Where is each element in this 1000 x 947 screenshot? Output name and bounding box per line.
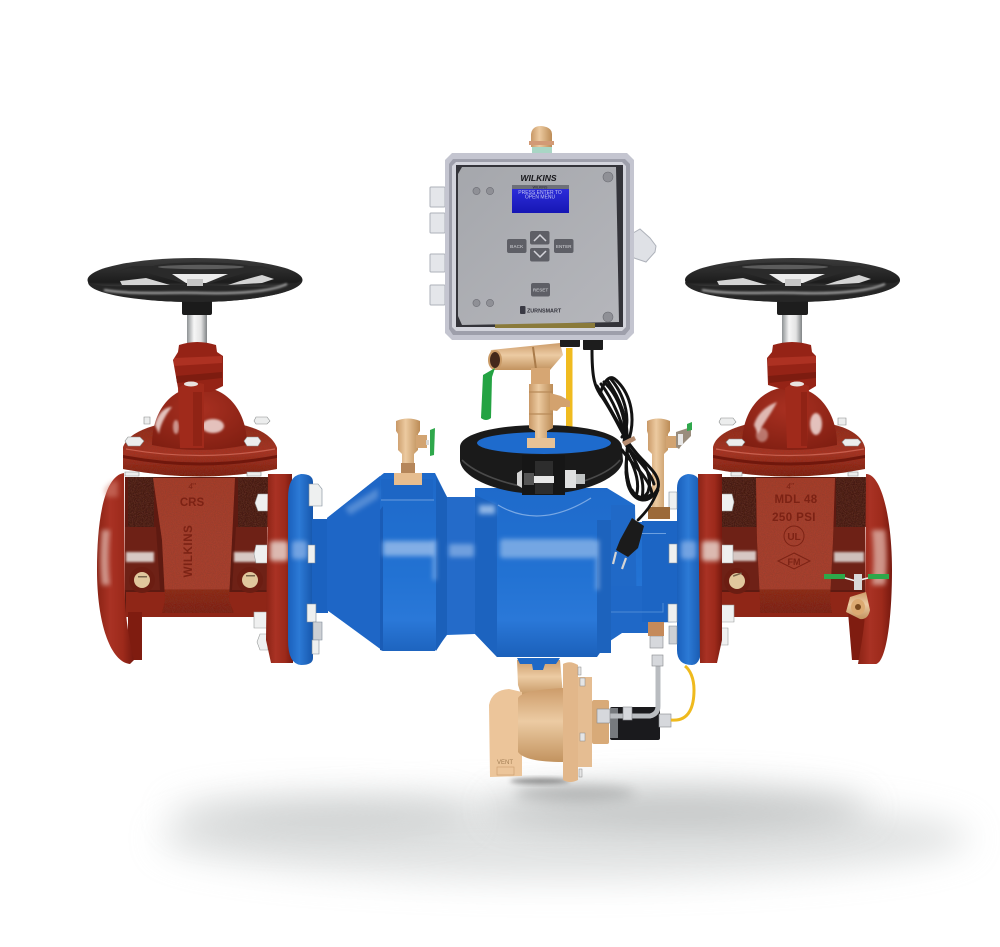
right valve dome <box>742 387 837 450</box>
steel elbow tube <box>598 665 658 716</box>
keypad <box>507 231 574 296</box>
LCD screen: WILKINS <box>533 186 548 190</box>
right latch <box>628 229 656 262</box>
rear flange <box>578 677 592 767</box>
clear cover <box>445 153 634 340</box>
right inner flange highlight <box>702 541 720 561</box>
blue body highlights <box>345 488 599 590</box>
clamp ring <box>460 425 623 495</box>
right valve raised markings: 4" <box>786 482 795 491</box>
floor shadow <box>160 778 970 880</box>
face panel <box>458 167 619 325</box>
right valve raised markings: FM <box>788 557 800 567</box>
left valve dome <box>152 387 247 450</box>
blue right flange <box>677 474 702 665</box>
brass bushing above <box>648 622 664 636</box>
left valve centre casting <box>153 478 235 613</box>
button: down <box>530 248 550 262</box>
tee stem <box>531 368 550 384</box>
right valve raised markings: 250 PSI <box>772 512 816 524</box>
yellow sensor wire upper <box>566 348 572 428</box>
left valve central rib <box>178 382 204 448</box>
left valve top flange <box>123 423 277 476</box>
side stub <box>550 393 570 411</box>
blue body silhouette <box>327 473 677 657</box>
left valve stem <box>187 314 207 346</box>
left outer flange <box>97 473 142 664</box>
left valve raised markings: 4" <box>188 482 197 491</box>
right valve raised markings <box>772 482 818 569</box>
right valve raised markings: UL <box>787 532 801 543</box>
right valve central rib <box>785 382 809 448</box>
right valve top flange <box>713 423 865 476</box>
centre saddle curve <box>498 498 591 516</box>
sensor with black housing <box>597 622 671 740</box>
blue right flange and fasteners <box>307 474 702 665</box>
right valve bonnet <box>767 342 816 392</box>
left valve raised markings: WILKINS <box>183 525 195 577</box>
flange disc <box>563 662 578 782</box>
right test cock <box>647 418 692 519</box>
button: up <box>530 231 550 244</box>
right valve inner flange <box>698 474 722 663</box>
hex base <box>527 438 555 448</box>
panel screws <box>473 172 613 322</box>
left valve raised markings <box>180 482 204 577</box>
clamp ring edge highlights <box>462 460 620 486</box>
left valve raised markings: CRS <box>180 497 204 509</box>
smart brand logo: ZURNSMART <box>527 308 562 314</box>
button: reset: RESET <box>533 288 548 293</box>
left hinge latches <box>430 187 445 305</box>
pipe opening <box>488 350 502 370</box>
yellow interior peek <box>495 323 595 328</box>
valve body bands <box>529 392 553 414</box>
right valve yoke nut <box>777 299 808 315</box>
right valve raised markings: MDL 48 <box>774 494 818 506</box>
relief main body <box>518 688 563 762</box>
clamp lug <box>522 455 565 495</box>
right valve dome highlights <box>754 402 822 442</box>
right handwheel <box>685 258 900 302</box>
cover bevels <box>449 159 630 335</box>
left valve plugs <box>129 567 263 593</box>
right valve plug <box>724 568 750 594</box>
right valve bolt heads <box>719 418 861 476</box>
button: enter: ENTER <box>556 244 572 249</box>
smart brand logo <box>520 306 562 314</box>
dark interior <box>456 165 623 327</box>
clamp ring body <box>460 425 623 494</box>
fastener bolts right <box>668 492 677 644</box>
power plug <box>613 518 644 569</box>
right valve centre casting <box>756 478 835 613</box>
left valve yoke nut <box>182 299 212 315</box>
blue right flange highlight <box>681 541 696 559</box>
right drain ball valve <box>824 574 889 619</box>
blue left neck <box>312 519 328 613</box>
horizontal brass pipe <box>490 343 563 370</box>
pipe ridge <box>533 347 536 369</box>
right valve body <box>722 477 865 617</box>
fastener bolts left <box>307 484 322 654</box>
ball valve body <box>529 384 553 438</box>
left valve bonnet <box>173 342 223 392</box>
central blue check valve body <box>288 473 677 665</box>
flange bolts <box>578 667 585 777</box>
blue cone shading <box>327 476 380 648</box>
left valve bolt heads <box>125 417 270 476</box>
blue left flange <box>288 474 313 665</box>
left inner flange highlight <box>270 541 288 561</box>
left gate valve <box>88 258 302 664</box>
WILKINS logo: WILKINS <box>520 173 557 183</box>
left valve hex bolts <box>254 494 268 650</box>
blue bottom boss <box>517 658 560 670</box>
elbow marking: VENT <box>497 760 513 766</box>
elbow body <box>489 689 522 777</box>
LCD screen: OPEN MENU <box>525 194 556 200</box>
clamp bolt <box>517 470 585 488</box>
LCD screen: PRESS ENTER TO <box>518 190 562 196</box>
controller enclosure <box>430 126 656 340</box>
right outer flange <box>848 474 892 664</box>
blue segment lines <box>380 477 677 657</box>
left valve inner flange <box>266 474 293 663</box>
right valve body shading <box>722 477 866 617</box>
LCD screen <box>512 185 569 213</box>
top copper vent <box>529 126 554 153</box>
left valve body <box>125 477 267 617</box>
power cord <box>592 350 658 520</box>
central brass relief assembly <box>481 343 570 448</box>
green lever <box>481 368 495 420</box>
brass neck <box>517 660 563 697</box>
left handwheel <box>88 258 302 302</box>
clamp ring blue interior <box>477 432 611 454</box>
button: back: BACK <box>510 244 524 249</box>
left valve dome highlights <box>155 407 224 434</box>
lower brass relief valve <box>489 658 609 782</box>
yellow sensor wire lower <box>671 666 694 720</box>
tube fittings <box>597 636 671 727</box>
right valve stem <box>782 314 802 346</box>
left valve body shading <box>125 477 268 617</box>
right valve hex bolts <box>720 494 734 645</box>
right gate valve <box>685 258 900 664</box>
cord tie <box>622 436 636 446</box>
left test cock <box>394 418 435 485</box>
wire gland nuts <box>560 339 603 350</box>
